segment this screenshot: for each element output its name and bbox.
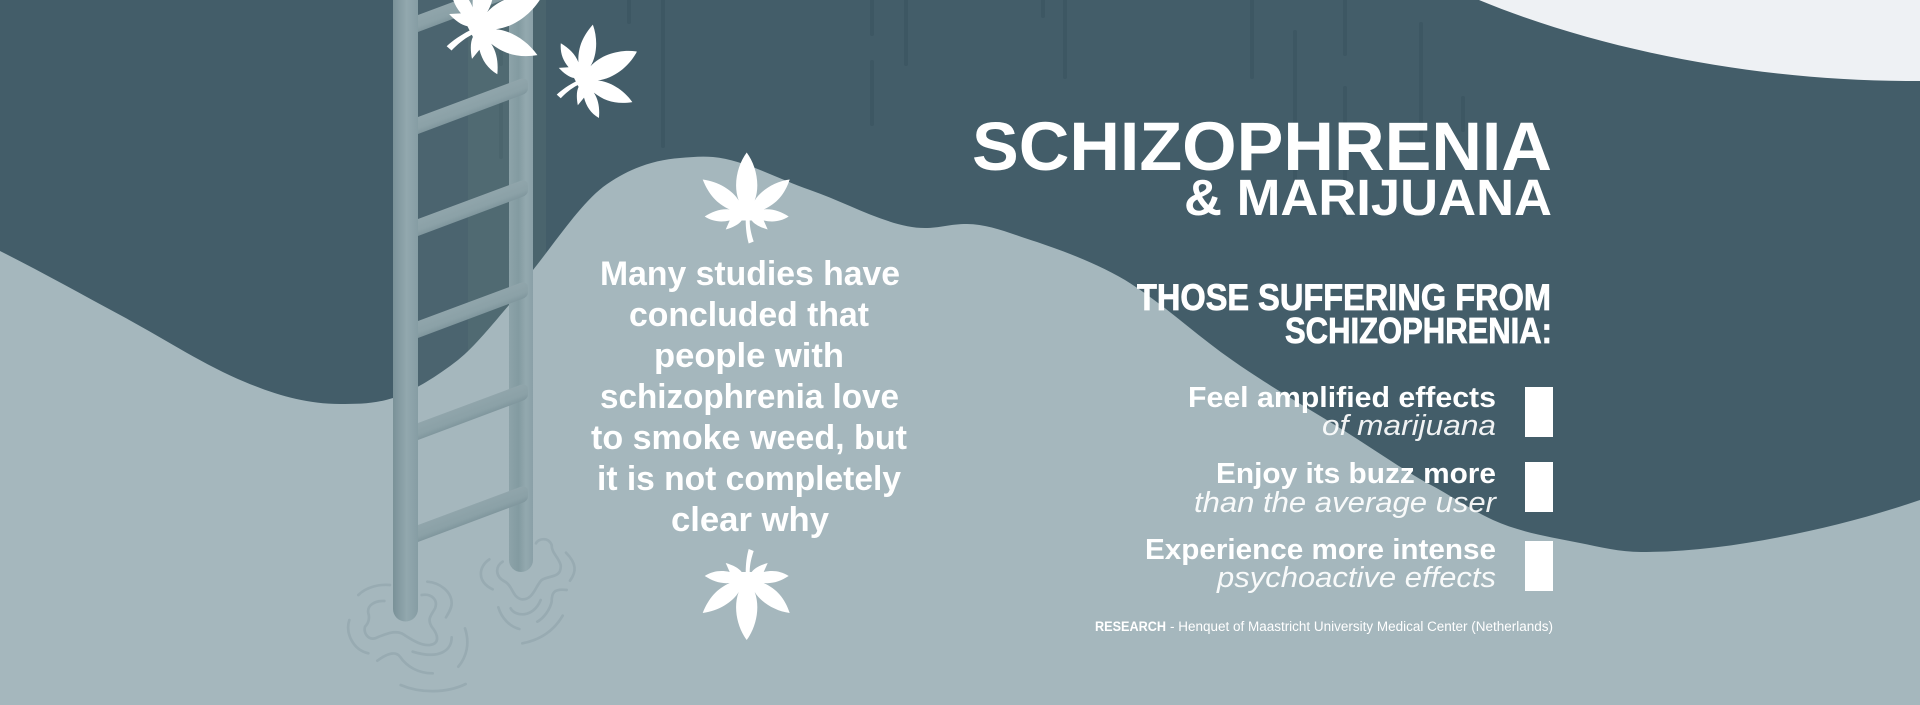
effect 2: than the average user bbox=[1194, 487, 1497, 519]
light hill bbox=[0, 157, 1920, 705]
effect 2: Enjoy its buzz more bbox=[1216, 458, 1496, 490]
effect 1 bbox=[1188, 382, 1553, 442]
paragraph: many studies: clear why bbox=[671, 501, 829, 539]
icon: falling leaf on ladder bbox=[422, 0, 566, 90]
effect 3 bbox=[1145, 534, 1553, 594]
rungs bbox=[418, 0, 528, 542]
paragraph: many studies: people with bbox=[654, 337, 844, 375]
light shaft behind ladder bbox=[393, 0, 546, 410]
effect 3: psychoactive effects bbox=[1216, 562, 1496, 594]
subheading bbox=[1137, 277, 1552, 351]
ladder bbox=[393, 0, 533, 621]
effect list bbox=[1145, 382, 1553, 594]
effect 1: Feel amplified effects bbox=[1188, 382, 1496, 414]
title bbox=[972, 108, 1552, 226]
dripping lines bbox=[501, 0, 1463, 215]
water ripples bbox=[348, 539, 575, 691]
left rail bbox=[393, 0, 418, 621]
icon: falling leaf right bbox=[536, 12, 656, 131]
subheading: SCHIZOPHRENIA: bbox=[1285, 310, 1552, 351]
icon: leaf above paragraph bbox=[703, 152, 790, 244]
paragraph: many studies: schizophrenia love bbox=[600, 378, 899, 416]
right rail bbox=[509, 0, 533, 572]
paragraph: many studies: Many studies have bbox=[600, 255, 900, 293]
subheading: THOSE SUFFERING FROM bbox=[1137, 277, 1551, 318]
paragraph: many studies: to smoke weed, but bbox=[591, 419, 907, 457]
title: & MARIJUANA bbox=[1184, 169, 1552, 226]
effect 3: Experience more intense bbox=[1145, 534, 1496, 566]
title: SCHIZOPHRENIA bbox=[972, 108, 1552, 185]
paragraph: many studies: it is not completely bbox=[597, 460, 901, 498]
effect 1: of marijuana bbox=[1322, 410, 1496, 442]
effect 2 bbox=[1194, 458, 1553, 519]
research credit: RESEARCH bbox=[1095, 619, 1166, 634]
paragraph: many studies: concluded that bbox=[629, 296, 869, 334]
icon: leaf below paragraph bbox=[703, 549, 790, 640]
research credit: - Henquet of Maastricht University Medical Center (Netherlands) bbox=[1170, 619, 1553, 634]
paragraph: many studies bbox=[591, 255, 907, 539]
top-right pale corner bbox=[1479, 0, 1920, 81]
